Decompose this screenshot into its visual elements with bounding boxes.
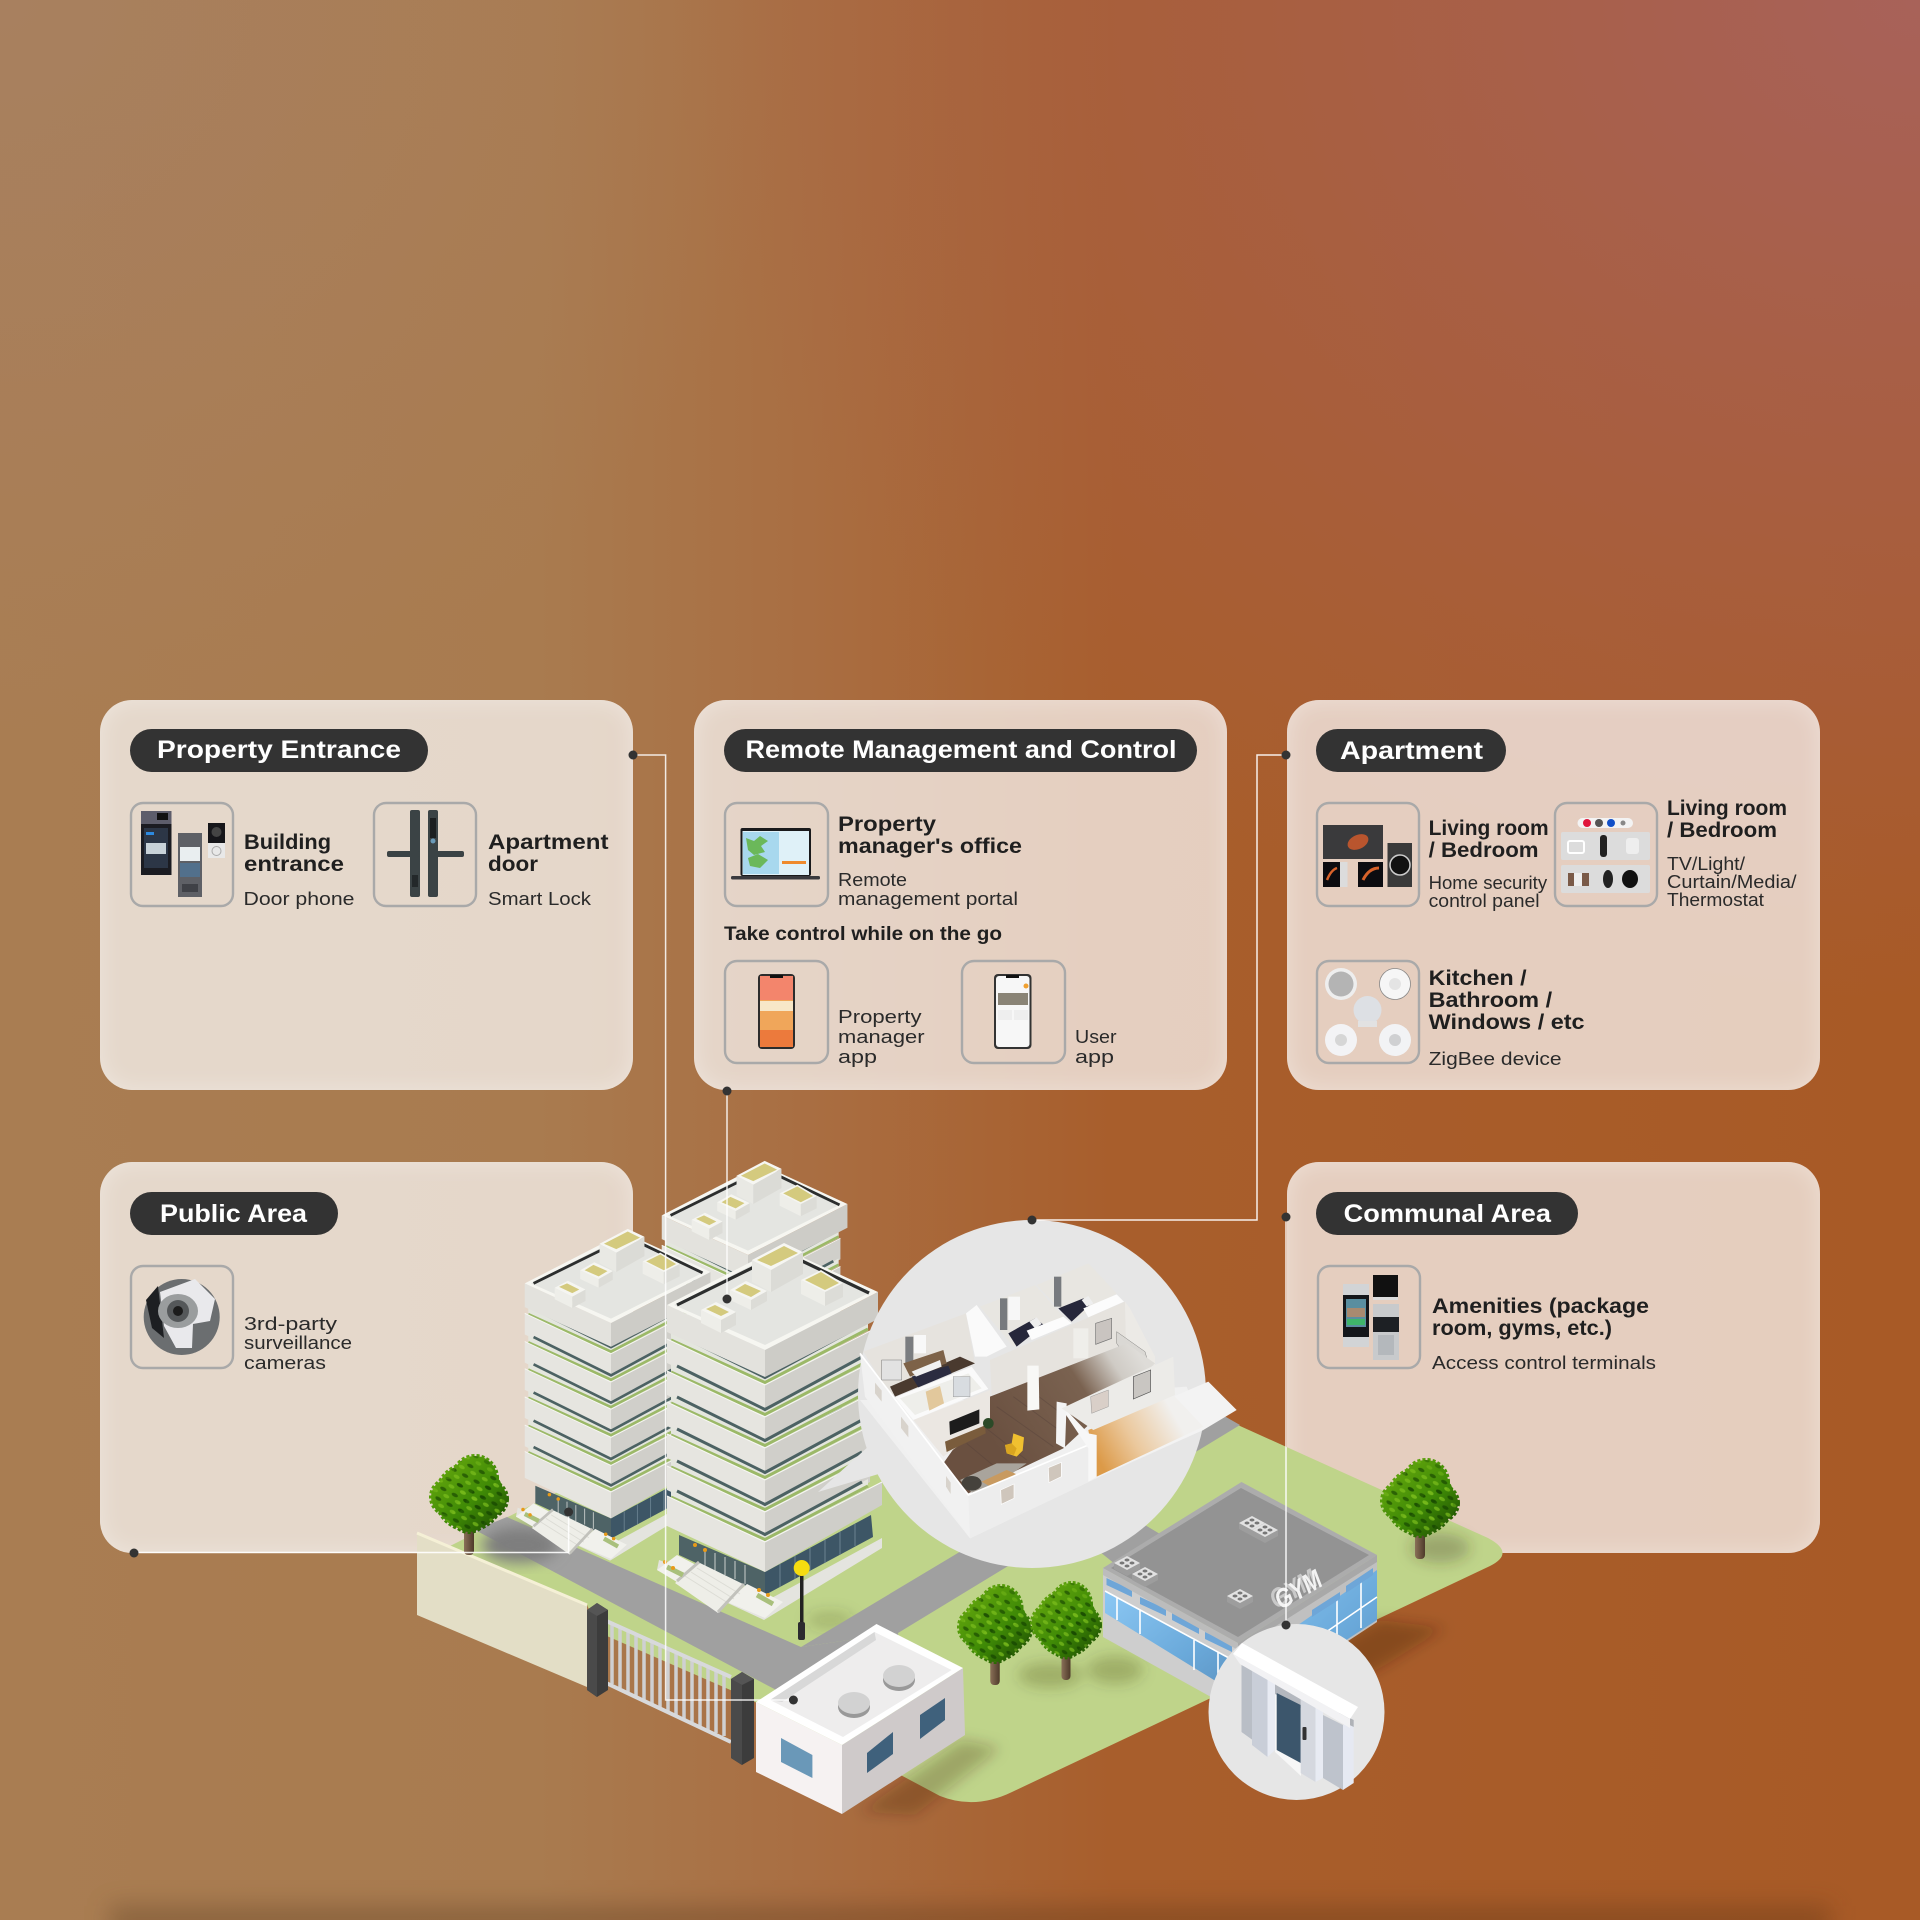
heading: Apartment [1316,729,1506,772]
gym sign: GYM [1264,1563,1323,1615]
text: Property manager's office [838,813,1022,909]
connector: Apartment to floor plan [1028,750,1290,1224]
text: Property manager app: manager [838,1026,924,1047]
text: Kitchen / Bathroom / Windows / etc, ZigBee device: ZigBee device [1429,1048,1562,1069]
text: Amenities, Access control terminals: Amenities (package [1432,1295,1649,1318]
gym building [1103,1482,1377,1712]
heading: Property Entrance: Property Entrance [157,736,401,764]
heading: Property Entrance [130,729,428,772]
panel: Remote Management and Control [694,700,1227,1090]
heading: Remote Management and Control: Remote Management and Control [746,736,1176,764]
tree: right [1382,1460,1458,1559]
text: Amenities, Access control terminals: room, gyms, etc.) [1432,1317,1612,1340]
text: Property manager's office: Remote [838,869,907,890]
icon: surveillance camera [131,1266,233,1368]
text: Kitchen / Bathroom / Windows / etc, ZigBee device [1429,967,1585,1069]
text: 3rd-party surveillance cameras: surveillance [244,1332,352,1353]
icon: ZigBee sensors [1317,961,1419,1063]
guardhouse [756,1624,965,1814]
text: Property manager app: app [838,1046,877,1067]
panel: Public Area [100,1162,633,1553]
text: User app: app [1075,1046,1114,1067]
text: User app [1075,1026,1116,1067]
text: Kitchen / Bathroom / Windows / etc, ZigBee device: Windows / etc [1429,1011,1585,1034]
text: Property manager app [838,1006,924,1067]
trees: centre pair [959,1583,1100,1685]
street lamp [794,1560,810,1640]
icon: home security control panels [1317,803,1419,906]
text: Property manager app: Property [838,1006,922,1027]
icon: access control terminals [1318,1266,1420,1368]
icon: user app phone [962,961,1065,1063]
panel: Property Entrance [100,700,633,1090]
tree: left [431,1456,507,1555]
heading: Public Area [130,1192,338,1235]
text: 3rd-party surveillance cameras: cameras [244,1352,326,1373]
heading: Public Area: Public Area [160,1200,308,1228]
tower: rear [653,1161,851,1493]
text: Property manager's office: Property [838,813,936,836]
ground: green lawn [450,1295,1503,1802]
text: Living room / Bedroom, Home security control panel: control panel [1429,890,1540,911]
icon: property manager app phone [725,961,828,1063]
text: Property manager's office: manager's office [838,835,1022,858]
text: Building entrance [244,831,354,909]
text: Living room / Bedroom, TV Light Curtain Media Thermostat: TV/Light/ [1667,853,1746,874]
icon: smart devices grid [1555,803,1657,906]
connector: Communal Area to entry door [1282,1212,1290,1630]
road: rear road [1095,1522,1170,1568]
apartment floor plan [860,1263,1237,1538]
heading: Apartment: Apartment [1340,737,1484,765]
tower: left [516,1229,714,1561]
text: Building entrance: Door phone [244,888,354,909]
heading: Communal Area: Communal Area [1344,1200,1552,1228]
connector: Remote Management to tower [722,1086,732,1304]
text: Apartment door: door [488,853,538,876]
panel: Communal Area [1287,1162,1820,1553]
callout: entry door circle [1208,1624,1384,1800]
connector: Public Area to tower entrance [130,1508,573,1558]
text: Kitchen / Bathroom / Windows / etc, ZigBee device: Kitchen / [1429,967,1527,990]
text: Amenities, Access control terminals [1432,1295,1656,1373]
icon: laptop [725,803,828,906]
icon: smart lock [374,803,476,906]
road: cross road [801,1405,1240,1647]
text: Living room / Bedroom, Home security control panel: Living room [1429,817,1549,840]
ground shadows [806,1533,1470,1815]
boundary wall [417,1533,587,1687]
gym sign: GYM [1269,1564,1328,1615]
connector: Property Entrance to guardhouse [628,750,798,1704]
text: Living room / Bedroom, Home security control panel: Home security [1429,872,1548,893]
text: Living room / Bedroom, TV Light Curtain Media Thermostat: Living room [1667,797,1787,820]
gate post: right [731,1672,754,1765]
text: Living room / Bedroom, Home security control panel [1429,817,1549,911]
text: 3rd-party surveillance cameras [244,1313,352,1373]
heading: Remote Management and Control [724,729,1197,772]
panel: Apartment [1287,700,1820,1090]
text: Kitchen / Bathroom / Windows / etc, ZigBee device: Bathroom / [1429,989,1552,1012]
road: entrance road [475,1517,905,1705]
text: 3rd-party surveillance cameras: 3rd-party [244,1313,338,1334]
text: Building entrance: entrance [244,853,344,876]
text: Amenities, Access control terminals: Access control terminals [1432,1352,1656,1373]
text: Apartment door: Apartment [488,831,609,854]
road shadow near tree [482,1527,558,1563]
gate post: left [587,1603,608,1697]
text: Apartment door: Smart Lock [488,888,592,909]
text: Take control while on the go: Take control while on the go [724,923,1002,945]
text: Living room / Bedroom, TV Light Curtain Media Thermostat: Thermostat [1667,889,1764,910]
callout: apartment circle [818,1220,1206,1568]
text: Living room / Bedroom, Home security control panel: / Bedroom [1429,839,1539,862]
text: User app: User [1075,1026,1116,1047]
gate [604,1620,731,1742]
tower: front [657,1243,882,1620]
text: Living room / Bedroom, TV Light Curtain Media Thermostat: Curtain/Media/ [1667,871,1797,892]
text: Property manager's office: management portal [838,888,1018,909]
text: Living room / Bedroom, TV Light Curtain Media Thermostat [1667,797,1797,910]
icon: door phones [131,803,233,906]
text: Living room / Bedroom, TV Light Curtain Media Thermostat: / Bedroom [1667,819,1777,842]
heading: Communal Area [1316,1192,1578,1235]
text: Building entrance: Building [244,831,331,854]
bottom edge shadow [110,1906,1830,1920]
text: Apartment door [488,831,609,909]
